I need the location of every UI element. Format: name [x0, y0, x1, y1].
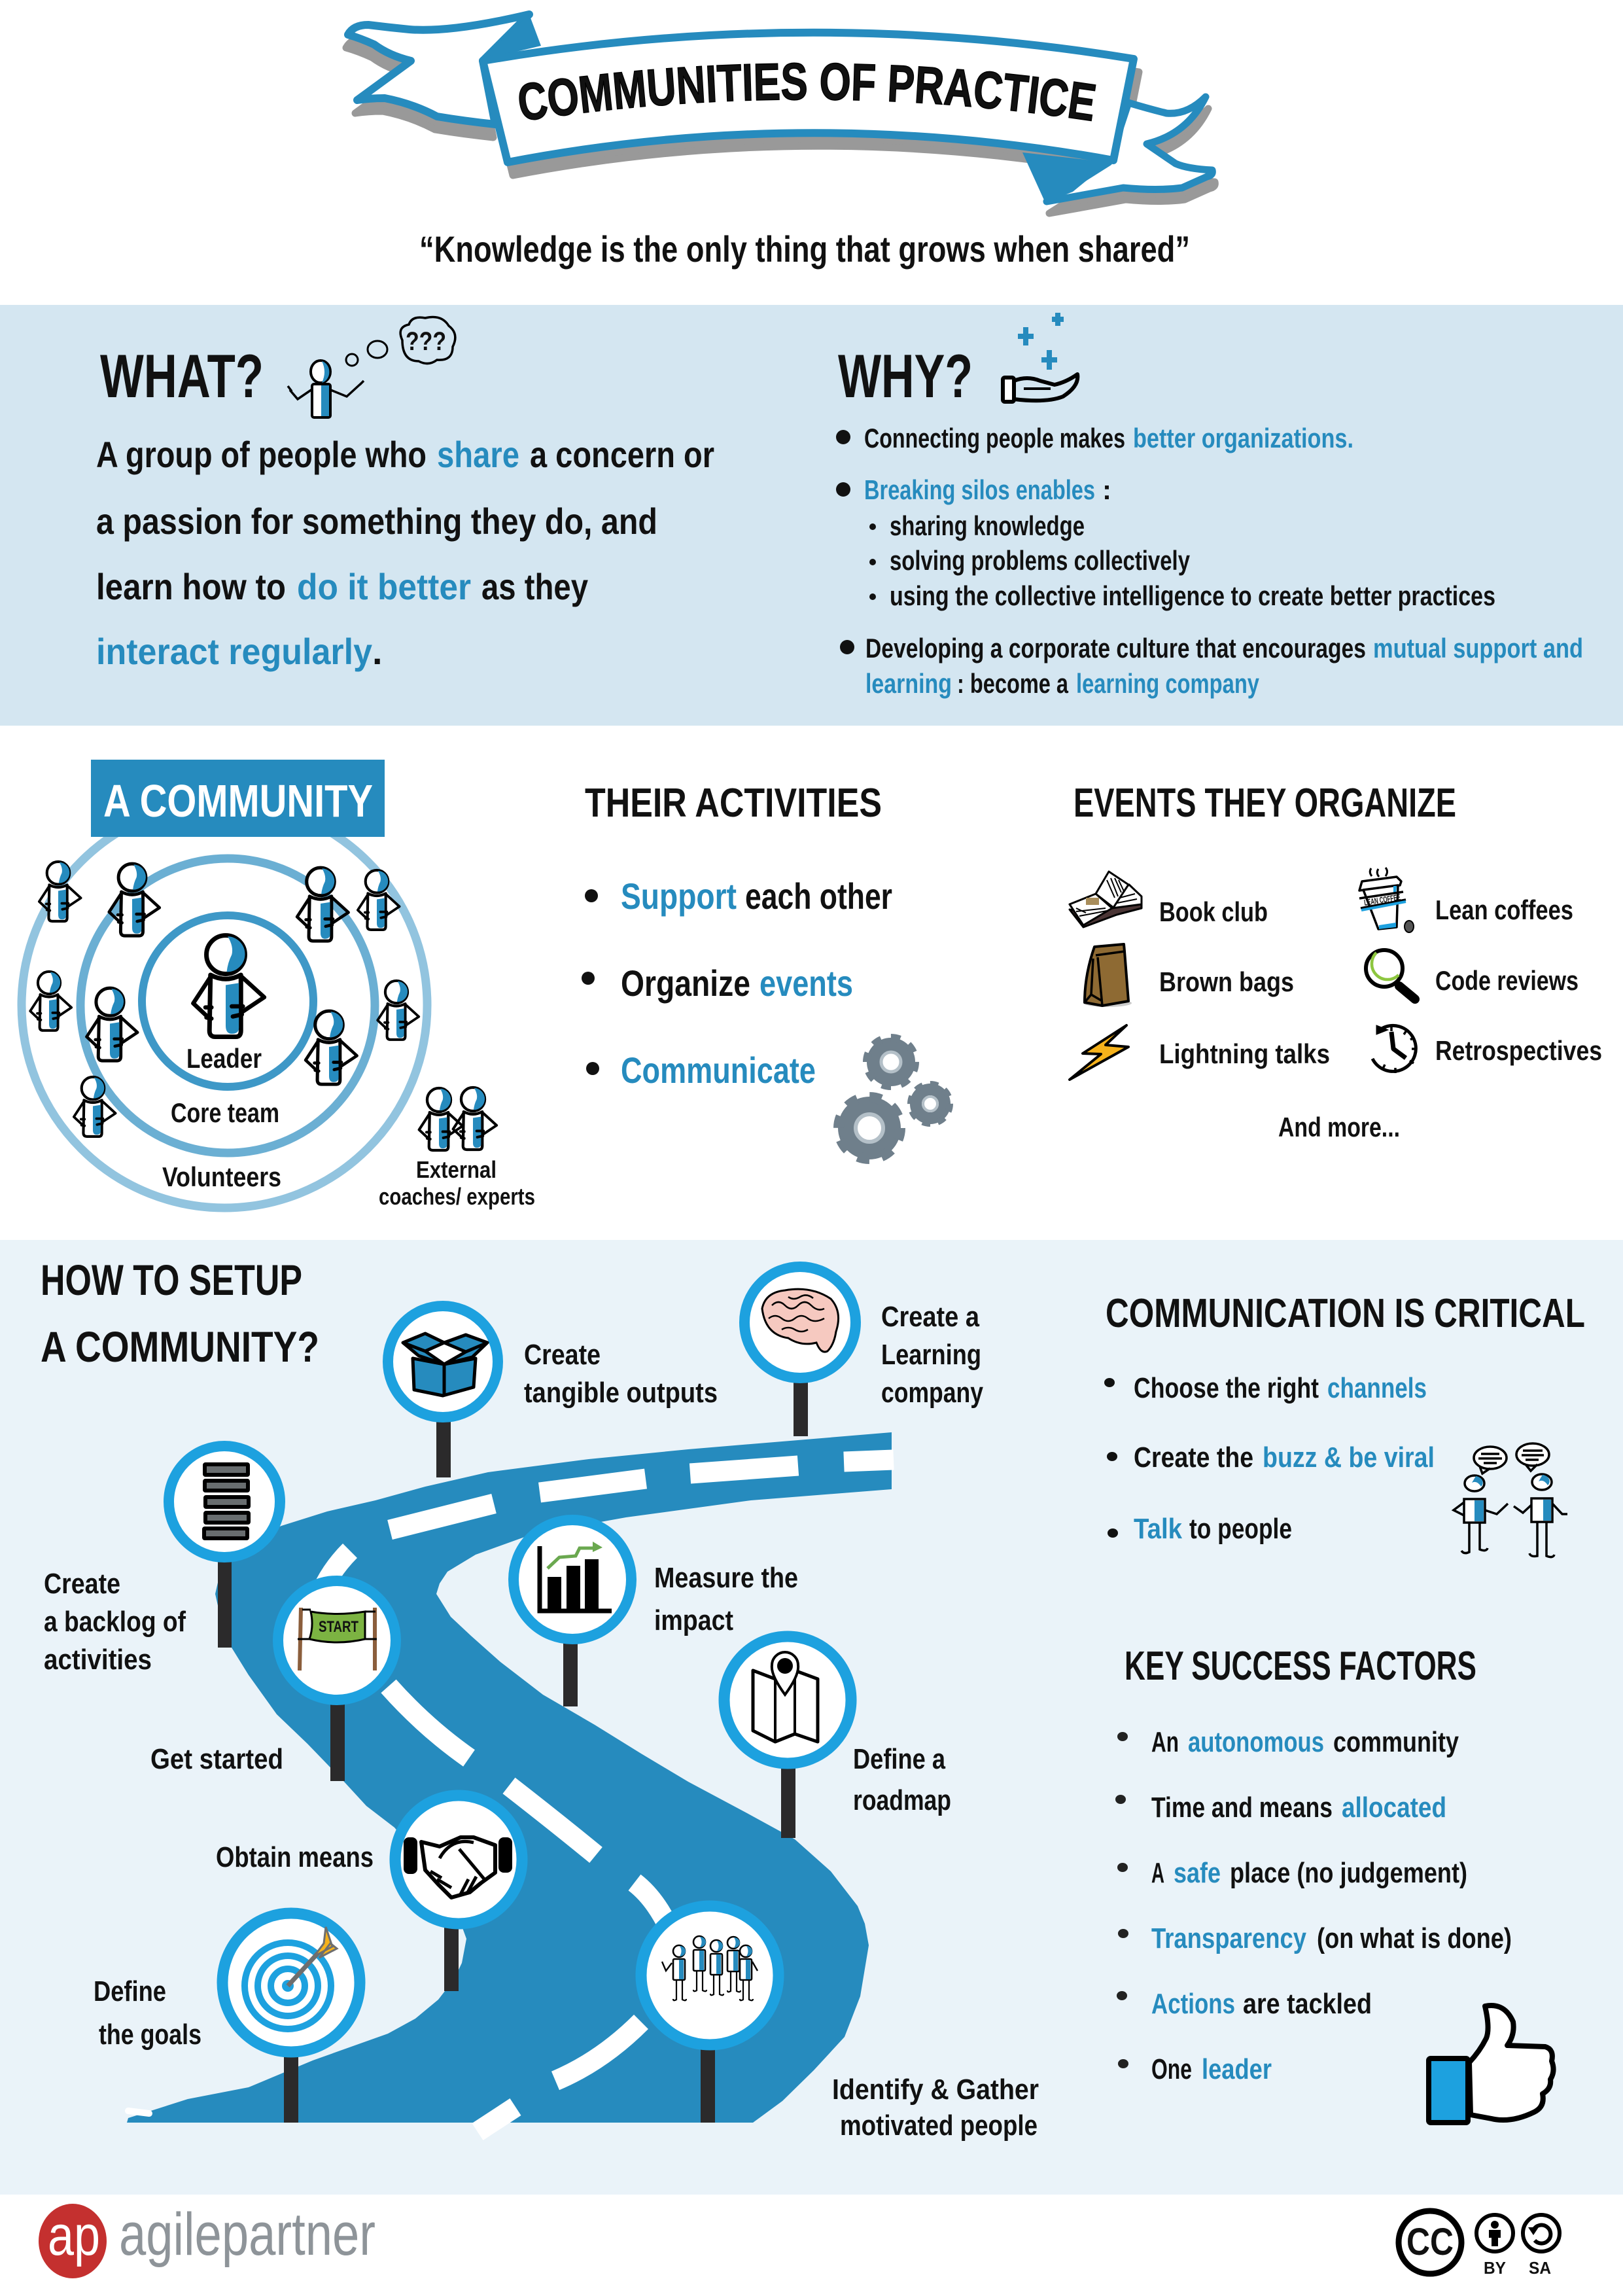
events labels: Lean coffees — [1435, 894, 1573, 925]
step labels: activities — [44, 1644, 152, 1676]
circle labels — [162, 1043, 535, 1210]
footer: creative commons licence: BY — [1484, 2258, 1506, 2278]
volunteer and core team figures — [30, 862, 419, 1137]
success factors list: One — [1151, 2053, 1192, 2085]
activities list: Organize — [621, 963, 750, 1004]
success factors list: (on what is done) — [1317, 1922, 1512, 1954]
icon: clock — [1372, 1025, 1417, 1073]
step labels: Measure the — [654, 1562, 798, 1594]
success factors list: A — [1151, 1857, 1164, 1889]
heading: how to setup: HOW TO SETUP — [41, 1256, 302, 1304]
footer: creative commons licence: CC — [1406, 2221, 1454, 2263]
panel: how to setup background — [0, 1240, 1623, 2195]
community circles — [22, 802, 427, 1208]
step labels: Define — [94, 1975, 166, 2007]
communication list: Talk — [1134, 1513, 1182, 1545]
why list: learning company — [1076, 668, 1259, 699]
footer logo: agilepartner: ap — [48, 2204, 100, 2267]
success factors list — [1115, 1726, 1512, 2085]
communication list — [1104, 1372, 1435, 1545]
success factors list: Transparency — [1151, 1922, 1306, 1954]
panel: communication is critical — [1104, 1291, 1585, 1557]
icon: coffee cup: LEAN COFFEE — [1363, 892, 1401, 908]
panel: what — [96, 317, 714, 672]
definition text: . — [372, 631, 383, 672]
sign: define a roadmap — [724, 1636, 851, 1763]
step labels: Create a — [881, 1301, 979, 1333]
activities list: events — [759, 963, 853, 1004]
panel: their activities — [582, 781, 950, 1159]
events labels: Book club — [1159, 896, 1268, 927]
step labels: Learning — [881, 1339, 981, 1371]
step labels: Create — [44, 1568, 120, 1600]
sign posts — [218, 1381, 808, 2123]
footer logo: agilepartner — [39, 2201, 375, 2278]
title banner — [343, 10, 1219, 217]
why list: learning — [865, 668, 952, 699]
why list: : — [1102, 474, 1111, 505]
step labels: Identify & Gather — [832, 2074, 1039, 2106]
step labels: impact — [654, 1604, 733, 1636]
heading: what: WHAT? — [100, 342, 264, 410]
success factors list: Time and means — [1151, 1792, 1333, 1824]
communication list: Choose the right — [1134, 1372, 1319, 1404]
step labels: Create — [524, 1339, 601, 1371]
heading: how to setup: A COMMUNITY? — [41, 1322, 319, 1371]
definition text: A group of people who — [96, 434, 427, 475]
circle labels: Core team — [171, 1097, 279, 1128]
why list: using the collective intelligence to create better practices — [890, 580, 1495, 611]
circle labels: External — [416, 1156, 497, 1183]
success factors list: place (no judgement) — [1230, 1857, 1467, 1889]
why list — [836, 423, 1583, 699]
activities list: Support — [621, 875, 737, 917]
sign: create backlog — [169, 1446, 280, 1557]
icon: coffee cup — [1359, 868, 1414, 932]
panel: key success factors — [1115, 1644, 1554, 2123]
circle labels: coaches/ experts — [379, 1183, 535, 1210]
step labels — [44, 1301, 1039, 2142]
success factors list: allocated — [1342, 1792, 1446, 1824]
events labels: And more... — [1278, 1112, 1400, 1142]
step labels: roadmap — [853, 1784, 951, 1816]
icon: confused person with thought bubble — [288, 317, 455, 417]
why list: : become a — [957, 668, 1068, 699]
sign: obtain means — [395, 1795, 522, 1924]
success factors list: are tackled — [1243, 1988, 1372, 2020]
icon: book — [1070, 872, 1142, 927]
success factors list: An — [1151, 1726, 1179, 1758]
definition text: a concern or — [530, 434, 714, 475]
step labels: Get started — [150, 1743, 283, 1775]
events labels: Code reviews — [1435, 965, 1579, 996]
footer: creative commons licence — [1399, 2211, 1560, 2278]
quote: “Knowledge is the only thing that grows when shared” — [419, 228, 1190, 270]
step labels: a backlog of — [44, 1606, 186, 1638]
title text: COMMUNITIES OF PRACTICE — [519, 63, 1096, 122]
step labels: Define a — [853, 1743, 945, 1775]
definition text: interact regularly — [96, 631, 372, 672]
heading: key success factors: KEY SUCCESS FACTORS — [1125, 1644, 1476, 1689]
why list: Breaking silos enables — [864, 474, 1095, 505]
panel: why — [836, 313, 1583, 699]
sign: get started: START — [319, 1618, 358, 1636]
leader figure — [193, 936, 264, 1037]
definition text: share — [437, 434, 519, 475]
step labels: Obtain means — [216, 1841, 374, 1873]
definition text: a passion for something they do, and — [96, 501, 657, 542]
sign: measure the impact chart — [514, 1520, 631, 1639]
communication list: channels — [1327, 1372, 1427, 1404]
external coaches figures — [419, 1087, 497, 1150]
activities list — [582, 875, 892, 1091]
icon: brown bag — [1083, 944, 1132, 1007]
events labels: Lightning talks — [1159, 1038, 1330, 1069]
footer logo: agilepartner: agilepartner — [119, 2201, 375, 2268]
success factors list: leader — [1202, 2053, 1272, 2085]
why list: solving problems collectively — [890, 545, 1190, 576]
success factors list: autonomous — [1188, 1726, 1324, 1758]
circle labels: Volunteers — [162, 1161, 281, 1192]
icon: thumbs up — [1429, 2005, 1554, 2123]
sign: define the goals — [222, 1913, 360, 2052]
why list: mutual support and — [1373, 633, 1583, 663]
heading: why: WHY? — [838, 342, 973, 410]
icon: lightning — [1070, 1025, 1128, 1080]
why list: better organizations. — [1133, 423, 1353, 453]
heading: events: EVENTS THEY ORGANIZE — [1073, 781, 1456, 826]
definition text: learn how to — [96, 566, 286, 607]
success factors list: Actions — [1151, 1988, 1235, 2020]
winding road — [127, 1432, 894, 2132]
heading: a community — [91, 760, 385, 837]
panel: what and why background — [0, 305, 1623, 726]
sign: tangible outputs box — [388, 1306, 498, 1417]
sign: learning company brain — [744, 1267, 856, 1378]
communication list: to people — [1189, 1513, 1292, 1545]
panel: a community — [22, 760, 535, 1210]
why list: Developing a corporate culture that encourages — [865, 633, 1366, 663]
panel: events they organize — [1070, 781, 1602, 1142]
success factors list: community — [1333, 1726, 1459, 1758]
definition text — [96, 434, 714, 672]
communication list: buzz & be viral — [1263, 1441, 1435, 1474]
panel: how to setup a community — [41, 1256, 1039, 2142]
sign: identify and gather people — [641, 1906, 778, 2045]
events labels: Brown bags — [1159, 966, 1294, 997]
why list: sharing knowledge — [890, 510, 1085, 541]
definition text: as they — [481, 566, 588, 607]
activities list: each other — [745, 875, 892, 917]
heading: their activities: THEIR ACTIVITIES — [585, 781, 882, 826]
communication list: Create the — [1134, 1441, 1253, 1474]
why list: Connecting people makes — [864, 423, 1125, 453]
definition text: do it better — [297, 566, 471, 607]
icon: magnifier — [1366, 950, 1415, 999]
activities list: Communicate — [621, 1050, 816, 1091]
step labels: the goals — [99, 2019, 201, 2051]
step labels: tangible outputs — [524, 1377, 718, 1409]
circle labels: Leader — [186, 1043, 262, 1074]
footer: creative commons licence: SA — [1529, 2258, 1551, 2278]
icon: confused person with thought bubble: ??? — [406, 327, 446, 356]
step labels: company — [881, 1377, 983, 1409]
heading: how to setup — [41, 1256, 319, 1371]
success factors list: safe — [1174, 1857, 1221, 1889]
step labels: motivated people — [840, 2110, 1038, 2142]
heading: a community: A COMMUNITY — [103, 775, 373, 826]
events labels — [1159, 894, 1602, 1142]
sign: get started — [278, 1581, 396, 1700]
icon: two people talking — [1454, 1443, 1567, 1557]
icon: gears — [839, 1038, 950, 1159]
icon: hand with plus signs — [1003, 313, 1077, 402]
